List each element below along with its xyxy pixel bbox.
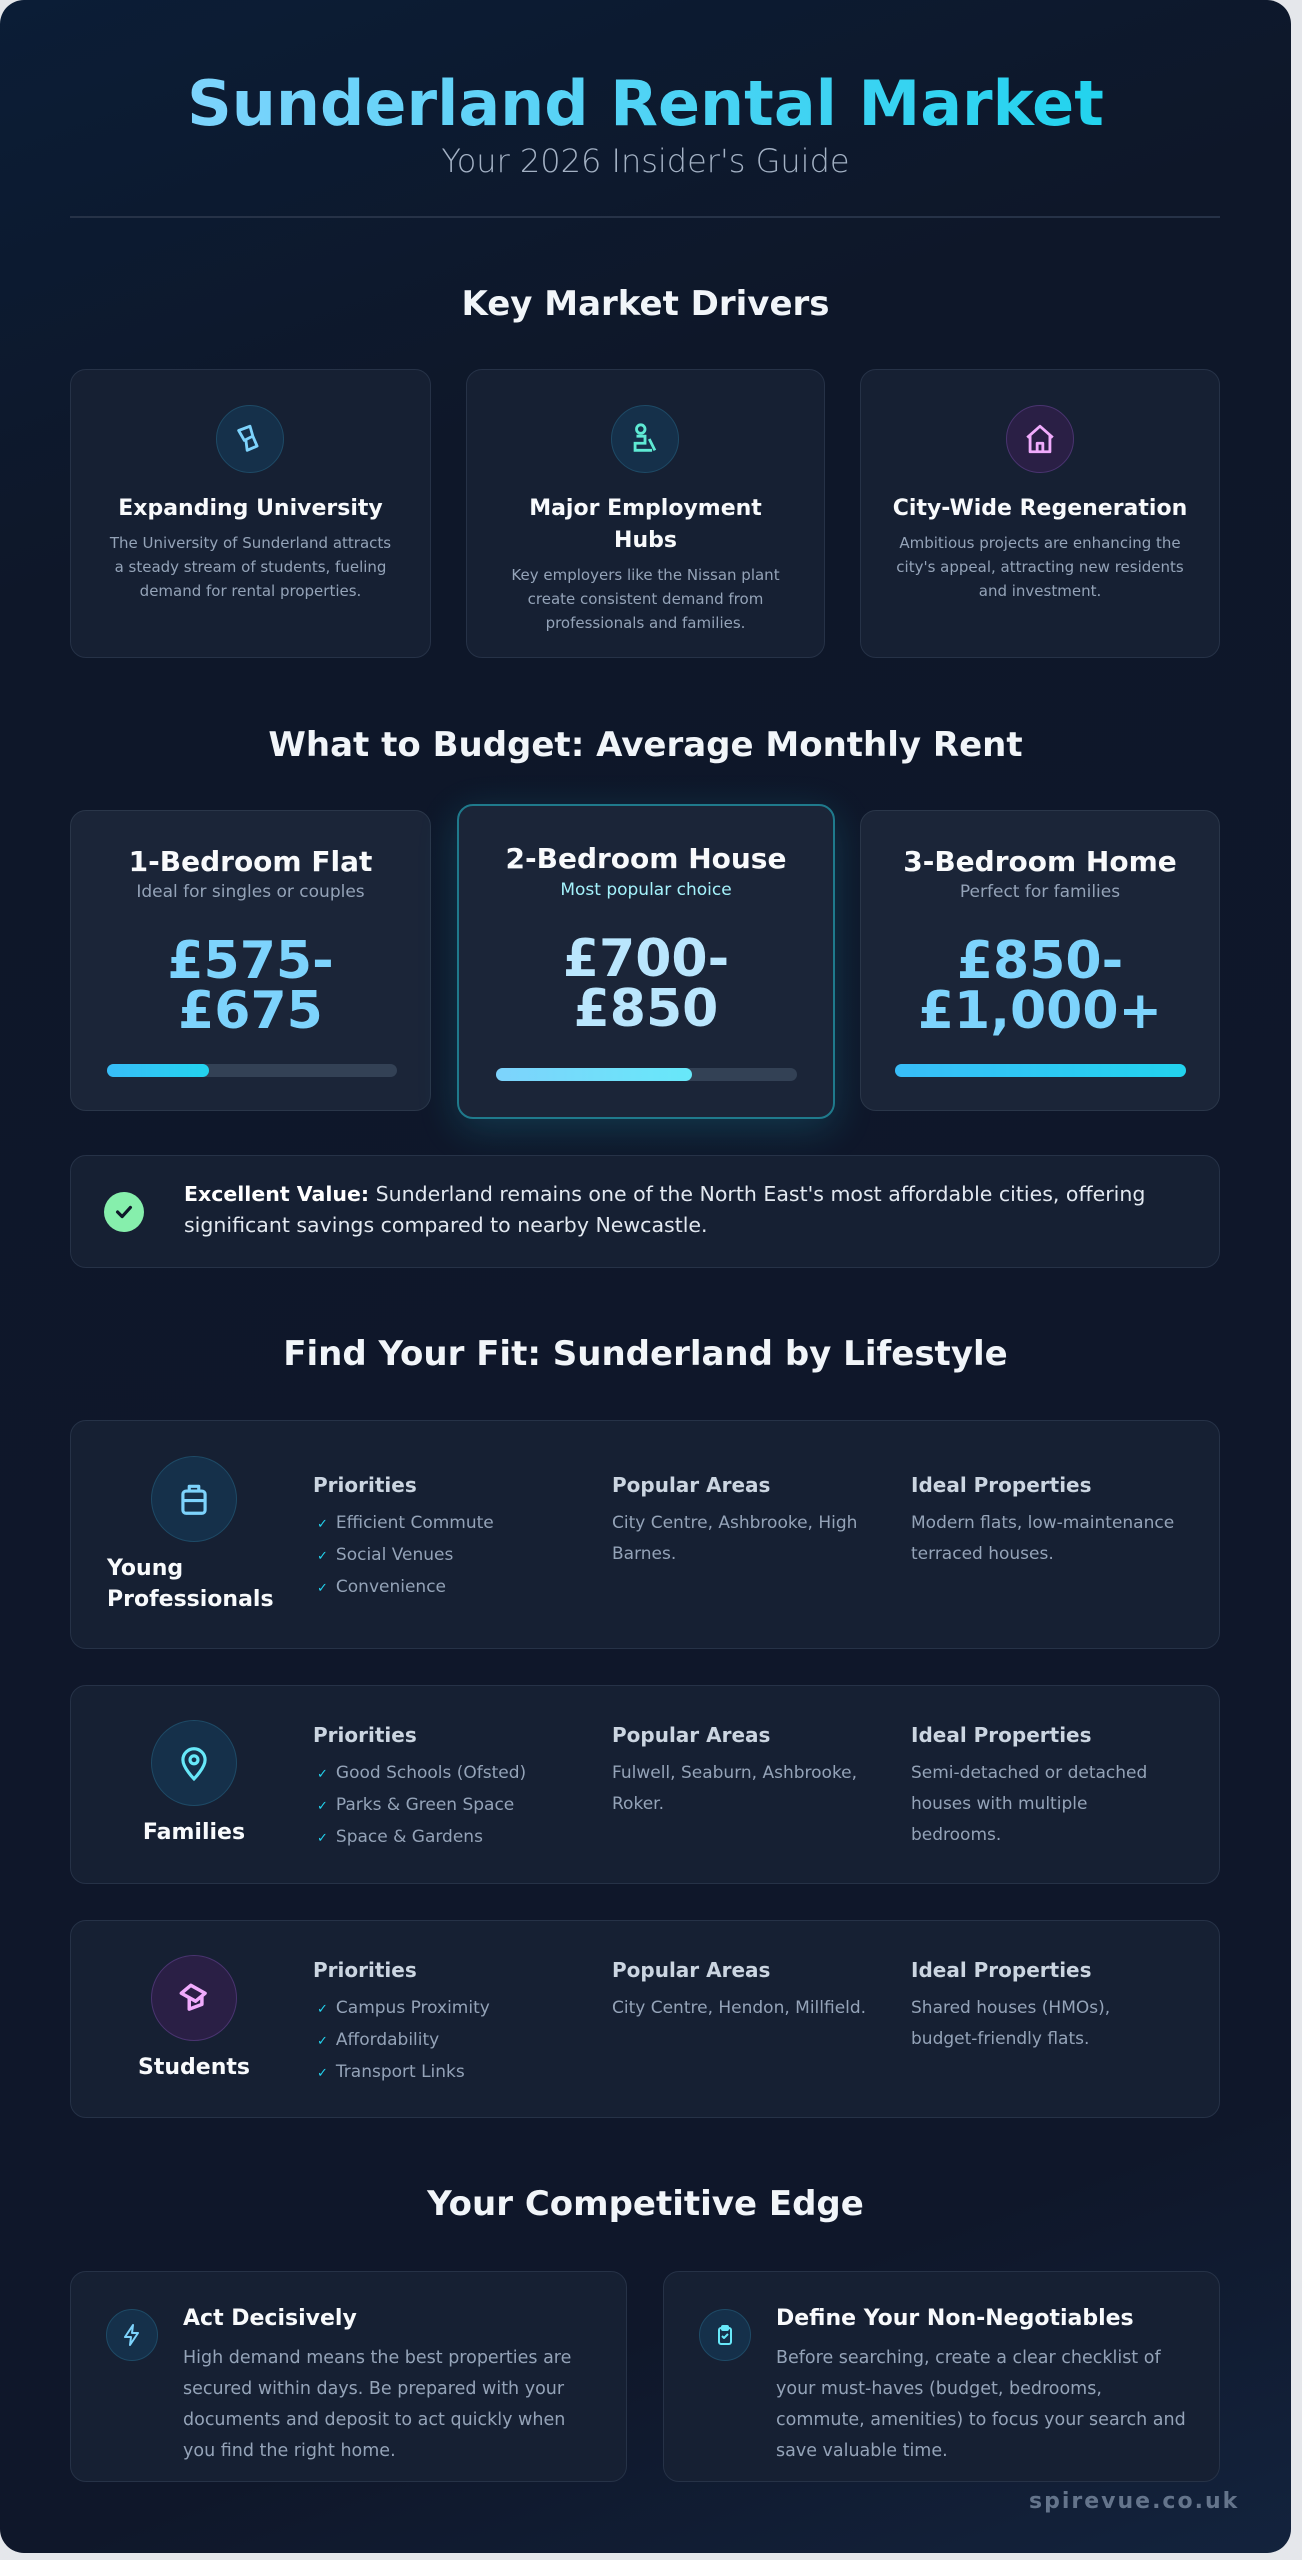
panel: young professionals: Ideal Properties [911, 1473, 1092, 1497]
panel: young professionals: Modern flats, low-maintenance terraced houses. [911, 1513, 1174, 1564]
panel: act decisively: High demand means the best properties are secured within days. Be prepared with your documents and deposit to act quickly when you find the right home. [183, 2348, 571, 2461]
panel: students: Students [138, 2055, 250, 2080]
panel: 1-bedroom: £675 [178, 981, 323, 1041]
panel: 3-bedroom [860, 810, 1220, 1111]
panel: regeneration: Ambitious projects are enhancing the city's appeal, attracting new residents and investment. [896, 534, 1184, 600]
icon: graduation cap [151, 1955, 237, 2041]
footer: brand: spirevue.co.uk [1029, 2489, 1239, 2514]
icon: briefcase [151, 1456, 237, 1542]
panel: non-negotiables: Before searching, create a clear checklist of your must-haves (budget, bedrooms, commute, amenities) to focus your search and save valuable time. [776, 2348, 1186, 2461]
panel: young professionals: Priorities [313, 1473, 417, 1497]
panel: young professionals: ✓ Efficient Commute [317, 1513, 494, 1533]
icon: lightning [106, 2309, 158, 2361]
panel: students: budget-friendly flats. [911, 2029, 1089, 2049]
panel: students: Ideal Properties [911, 1958, 1092, 1982]
panel: regeneration: City-Wide Regeneration [893, 496, 1187, 521]
panel: expanding university: Expanding University [118, 496, 383, 521]
panel: non-negotiables [663, 2271, 1220, 2482]
panel: families: Semi-detached or detached houses with multiple bedrooms. [911, 1763, 1147, 1845]
panel: 2-bedroom: £700- [563, 929, 729, 989]
bar: 3-bed [895, 1064, 1186, 1077]
panel: students: Shared houses (HMOs), [911, 1998, 1110, 2018]
panel: regeneration [860, 369, 1220, 658]
panel: families: Popular Areas [612, 1723, 770, 1747]
panel: 2-bedroom: 2-Bedroom House [506, 842, 786, 875]
bar: 2-bed [496, 1068, 797, 1081]
callout: excellent value [70, 1155, 1220, 1268]
subtitle: Your 2026 Insider's Guide [441, 142, 850, 180]
callout: excellent value: Excellent Value: Sunderland remains one of the North East's most affordable cities, offering significant savings compared to nearby Newcastle. [184, 1182, 1145, 1237]
panel: students [70, 1920, 1220, 2118]
icon: house [1006, 405, 1074, 473]
panel: families: ✓ Good Schools (Ofsted) [317, 1763, 526, 1783]
panel: employment hubs: Major Employment [529, 496, 762, 521]
panel: young professionals: ✓ Convenience [317, 1577, 446, 1597]
icon: graduation [216, 405, 284, 473]
panel: 2-bedroom [457, 804, 835, 1119]
panel: non-negotiables: Define Your Non-Negotiables [776, 2306, 1134, 2331]
panel: young professionals [70, 1420, 1220, 1649]
panel: students: ✓ Campus Proximity [317, 1998, 490, 2018]
panel: young professionals: Professionals [107, 1587, 274, 1612]
panel: expanding university [70, 369, 431, 658]
panel: families: Ideal Properties [911, 1723, 1092, 1747]
panel: students: City Centre, Hendon, Millfield. [612, 1998, 866, 2018]
panel: act decisively [70, 2271, 627, 2482]
icon: check [104, 1192, 144, 1232]
panel: 2-bedroom: Most popular choice [560, 880, 732, 900]
panel: students: ✓ Affordability [317, 2030, 439, 2050]
panel: students: Popular Areas [612, 1958, 770, 1982]
panel: young professionals: City Centre, Ashbrooke, High Barnes. [612, 1513, 857, 1564]
bar: 1-bed [107, 1064, 397, 1077]
panel: act decisively: Act Decisively [183, 2306, 357, 2331]
panel: young professionals: ✓ Social Venues [317, 1545, 453, 1565]
panel: 3-bedroom: £850- [957, 931, 1123, 991]
panel: 1-bedroom: 1-Bedroom Flat [129, 845, 372, 878]
panel: students: Priorities [313, 1958, 417, 1982]
heading: find your fit: Find Your Fit: Sunderland by Lifestyle [283, 1334, 1008, 1374]
icon: worker [611, 405, 679, 473]
panel: 3-bedroom: £1,000+ [918, 981, 1162, 1041]
panel: 2-bedroom: £850 [574, 979, 718, 1039]
panel: employment hubs: Key employers like the Nissan plant create consistent demand from professionals and families. [511, 566, 780, 632]
heading: competitive edge: Your Competitive Edge [427, 2184, 864, 2224]
panel: 1-bedroom: Ideal for singles or couples [136, 882, 365, 902]
title: Sunderland Rental Market [187, 67, 1104, 140]
panel: employment hubs [466, 369, 825, 658]
icon: clipboard [699, 2309, 751, 2361]
panel: families: Fulwell, Seaburn, Ashbrooke, Roker. [612, 1763, 857, 1814]
heading: key market drivers: Key Market Drivers [461, 284, 830, 324]
panel: 1-bedroom: £575- [167, 931, 334, 991]
panel: 3-bedroom: 3-Bedroom Home [903, 845, 1177, 878]
panel: young professionals: Young [107, 1556, 183, 1581]
panel: employment hubs: Hubs [614, 528, 677, 553]
panel: young professionals: Popular Areas [612, 1473, 770, 1497]
panel: 3-bedroom: Perfect for families [960, 882, 1120, 902]
panel: families: Families [143, 1820, 245, 1845]
panel: students: ✓ Transport Links [317, 2062, 465, 2082]
panel: families: ✓ Space & Gardens [317, 1827, 483, 1847]
icon: location pin [151, 1720, 237, 1806]
panel: expanding university: The University of Sunderland attracts a steady stream of students, fueling demand for rental properties. [110, 534, 391, 600]
panel: 1-bedroom [70, 810, 431, 1111]
panel: families: Priorities [313, 1723, 417, 1747]
heading: budget: What to Budget: Average Monthly Rent [268, 725, 1023, 765]
panel: families: ✓ Parks & Green Space [317, 1795, 514, 1815]
panel: families [70, 1685, 1220, 1884]
